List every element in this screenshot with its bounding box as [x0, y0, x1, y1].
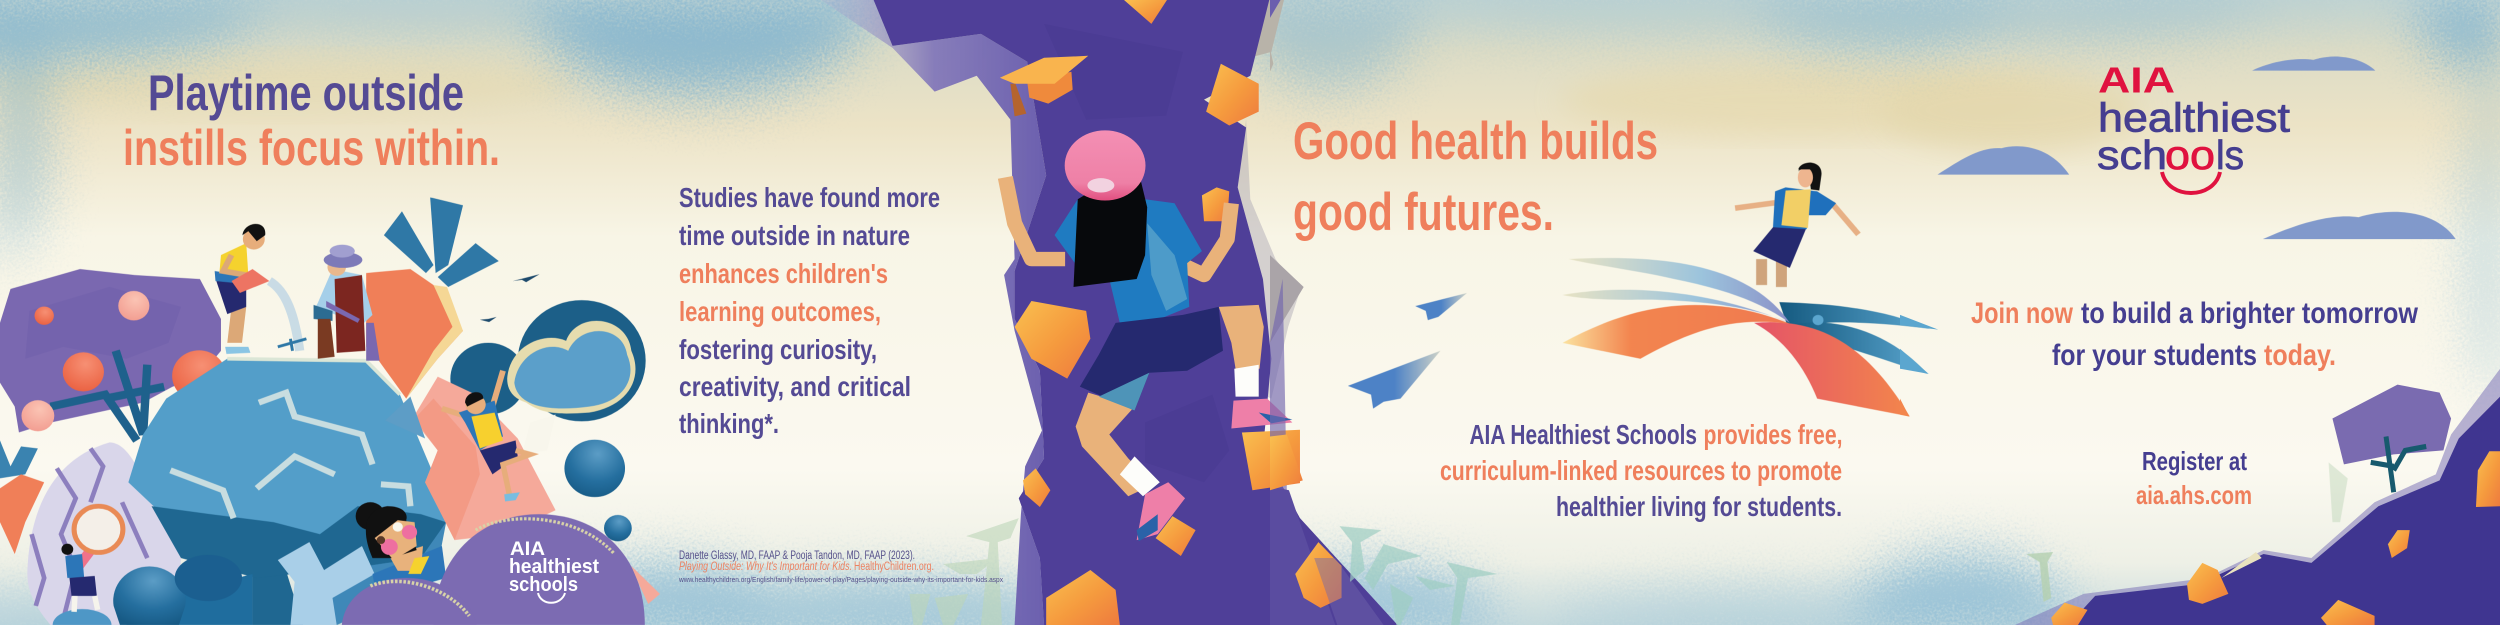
logo: AIA healthiest schools colour: healthiest: [2098, 94, 2291, 140]
icon: small carrot: [0, 440, 44, 554]
icon: orange holds: [1015, 0, 1300, 625]
panel: climbing wall illustration: [821, 0, 1398, 625]
wall edge light: [821, 0, 1300, 625]
icon: pale trees: [1339, 526, 1497, 625]
text block: AIA Healthiest Schools provides: [1440, 419, 1842, 522]
logo: AIA healthiest schools colour: oo: [2165, 132, 2215, 178]
citation: Danette Glassy, MD, FAAP & Pooja Tandon, MD, FAAP (2023).: [679, 550, 915, 562]
text block: join now: Join now: [1971, 297, 2074, 330]
text block: AIA Healthiest Schools provides: healthier living for students.: [1556, 491, 1842, 522]
icon: distant pale trees: [2026, 462, 2348, 602]
title: Playtime outside: Playtime outside: [148, 65, 464, 121]
text block: join now: today.: [2264, 339, 2336, 372]
text block: studies: Studies have found more: [679, 182, 940, 213]
icon: book ribbon edge: [1900, 315, 1938, 417]
icon: sliding child: [442, 371, 530, 501]
text block: register: Register at: [2142, 446, 2247, 476]
icon: pale stone: [27, 442, 181, 625]
panel: books and planes illustration: [1270, 0, 1930, 625]
icon: pink slide: [385, 377, 556, 540]
citation: HealthyChildren.org.: [854, 561, 934, 573]
text block: studies: thinking*.: [679, 408, 779, 439]
icon: watering child: [215, 224, 306, 354]
icon: big carrot: [366, 197, 499, 399]
icon: girl with magnifier: [61, 506, 123, 612]
citation: [678, 550, 1003, 584]
icon: blue cloud tree: [450, 300, 646, 454]
icon: purple tree on hill: [2332, 385, 2451, 492]
logo: white on purple: healthiest: [509, 556, 599, 578]
wall continuation: [1270, 0, 1384, 625]
logo: AIA healthiest schools colour: AIA: [2098, 60, 2175, 100]
text block: join now: to build a brighter tomorrow: [2081, 297, 2419, 330]
icon: purple hill: [2015, 369, 2500, 625]
text block: AIA Healthiest Schools provides: AIA Healthiest Schools: [1470, 419, 1697, 450]
text block: AIA Healthiest Schools provides: provides free,: [1704, 419, 1842, 450]
icon: open book ribbons: [1563, 258, 1930, 417]
icon: standing girl: [1735, 163, 1858, 287]
icon: bottom girl: [356, 502, 446, 598]
icon: birds: [480, 274, 540, 322]
icon: graduation cap: [1000, 56, 1088, 116]
citation: Playing Outside: Why It's Important for Kids.: [679, 561, 852, 573]
logo: AIA healthiest schools colour: [2097, 60, 2291, 193]
text block: studies: fostering curiosity,: [679, 334, 877, 365]
wall body: [874, 0, 1398, 625]
text block: register: aia.ahs.com: [2136, 480, 2252, 510]
text block: studies: creativity, and critical: [679, 371, 911, 402]
heading: Good health builds good futures: [1293, 112, 1658, 242]
text block: AIA Healthiest Schools provides: curriculum-linked resources to promote: [1440, 455, 1842, 486]
heading: Good health builds good futures: good futures.: [1293, 183, 1554, 242]
text block: join now: for your students: [2052, 339, 2257, 372]
icon: big blue rock: [128, 359, 446, 625]
logo: white on purple: [509, 539, 599, 603]
icon: large paper plane: [1348, 351, 1440, 409]
icon: pale trees: [909, 518, 1019, 625]
logo: white on purple: schools: [509, 574, 578, 596]
logo: white on purple: AIA: [510, 539, 545, 560]
icon: gardener: [314, 245, 380, 361]
icon: purple mounds: [342, 514, 660, 625]
title: Playtime outside: [123, 65, 500, 176]
icon: blue balls: [564, 440, 632, 541]
icon: purple fruit tree: [0, 269, 226, 440]
panel: logo and hill illustration: [1900, 57, 2500, 625]
icon: clouds: [1938, 57, 2456, 239]
icon: light tree trunk: [126, 542, 375, 625]
logo: AIA healthiest schools colour: sch: [2097, 132, 2167, 178]
text block: studies: [679, 182, 940, 439]
text block: studies: learning outcomes,: [679, 296, 881, 327]
text block: studies: enhances children's: [679, 258, 888, 289]
icon: small paper plane: [1415, 293, 1467, 320]
title: Playtime outside: instills focus within.: [123, 120, 500, 176]
citation: www.healthychildren.org/English/family-life/power-of-play/Pages/playing-outside-why-its-important-for-kids.aspx: [678, 575, 1003, 584]
text block: join now: [1971, 297, 2419, 372]
icon: climber girl: [1005, 130, 1292, 541]
icon: dark balls: [53, 555, 242, 625]
text block: register: [2136, 446, 2252, 510]
heading: Good health builds good futures: Good health builds: [1293, 112, 1658, 171]
text block: studies: time outside in nature: [679, 220, 910, 251]
icon: orange holds: [2051, 451, 2500, 625]
logo: AIA healthiest schools colour: ls: [2216, 132, 2244, 178]
panel: garden illustration: [0, 197, 660, 625]
